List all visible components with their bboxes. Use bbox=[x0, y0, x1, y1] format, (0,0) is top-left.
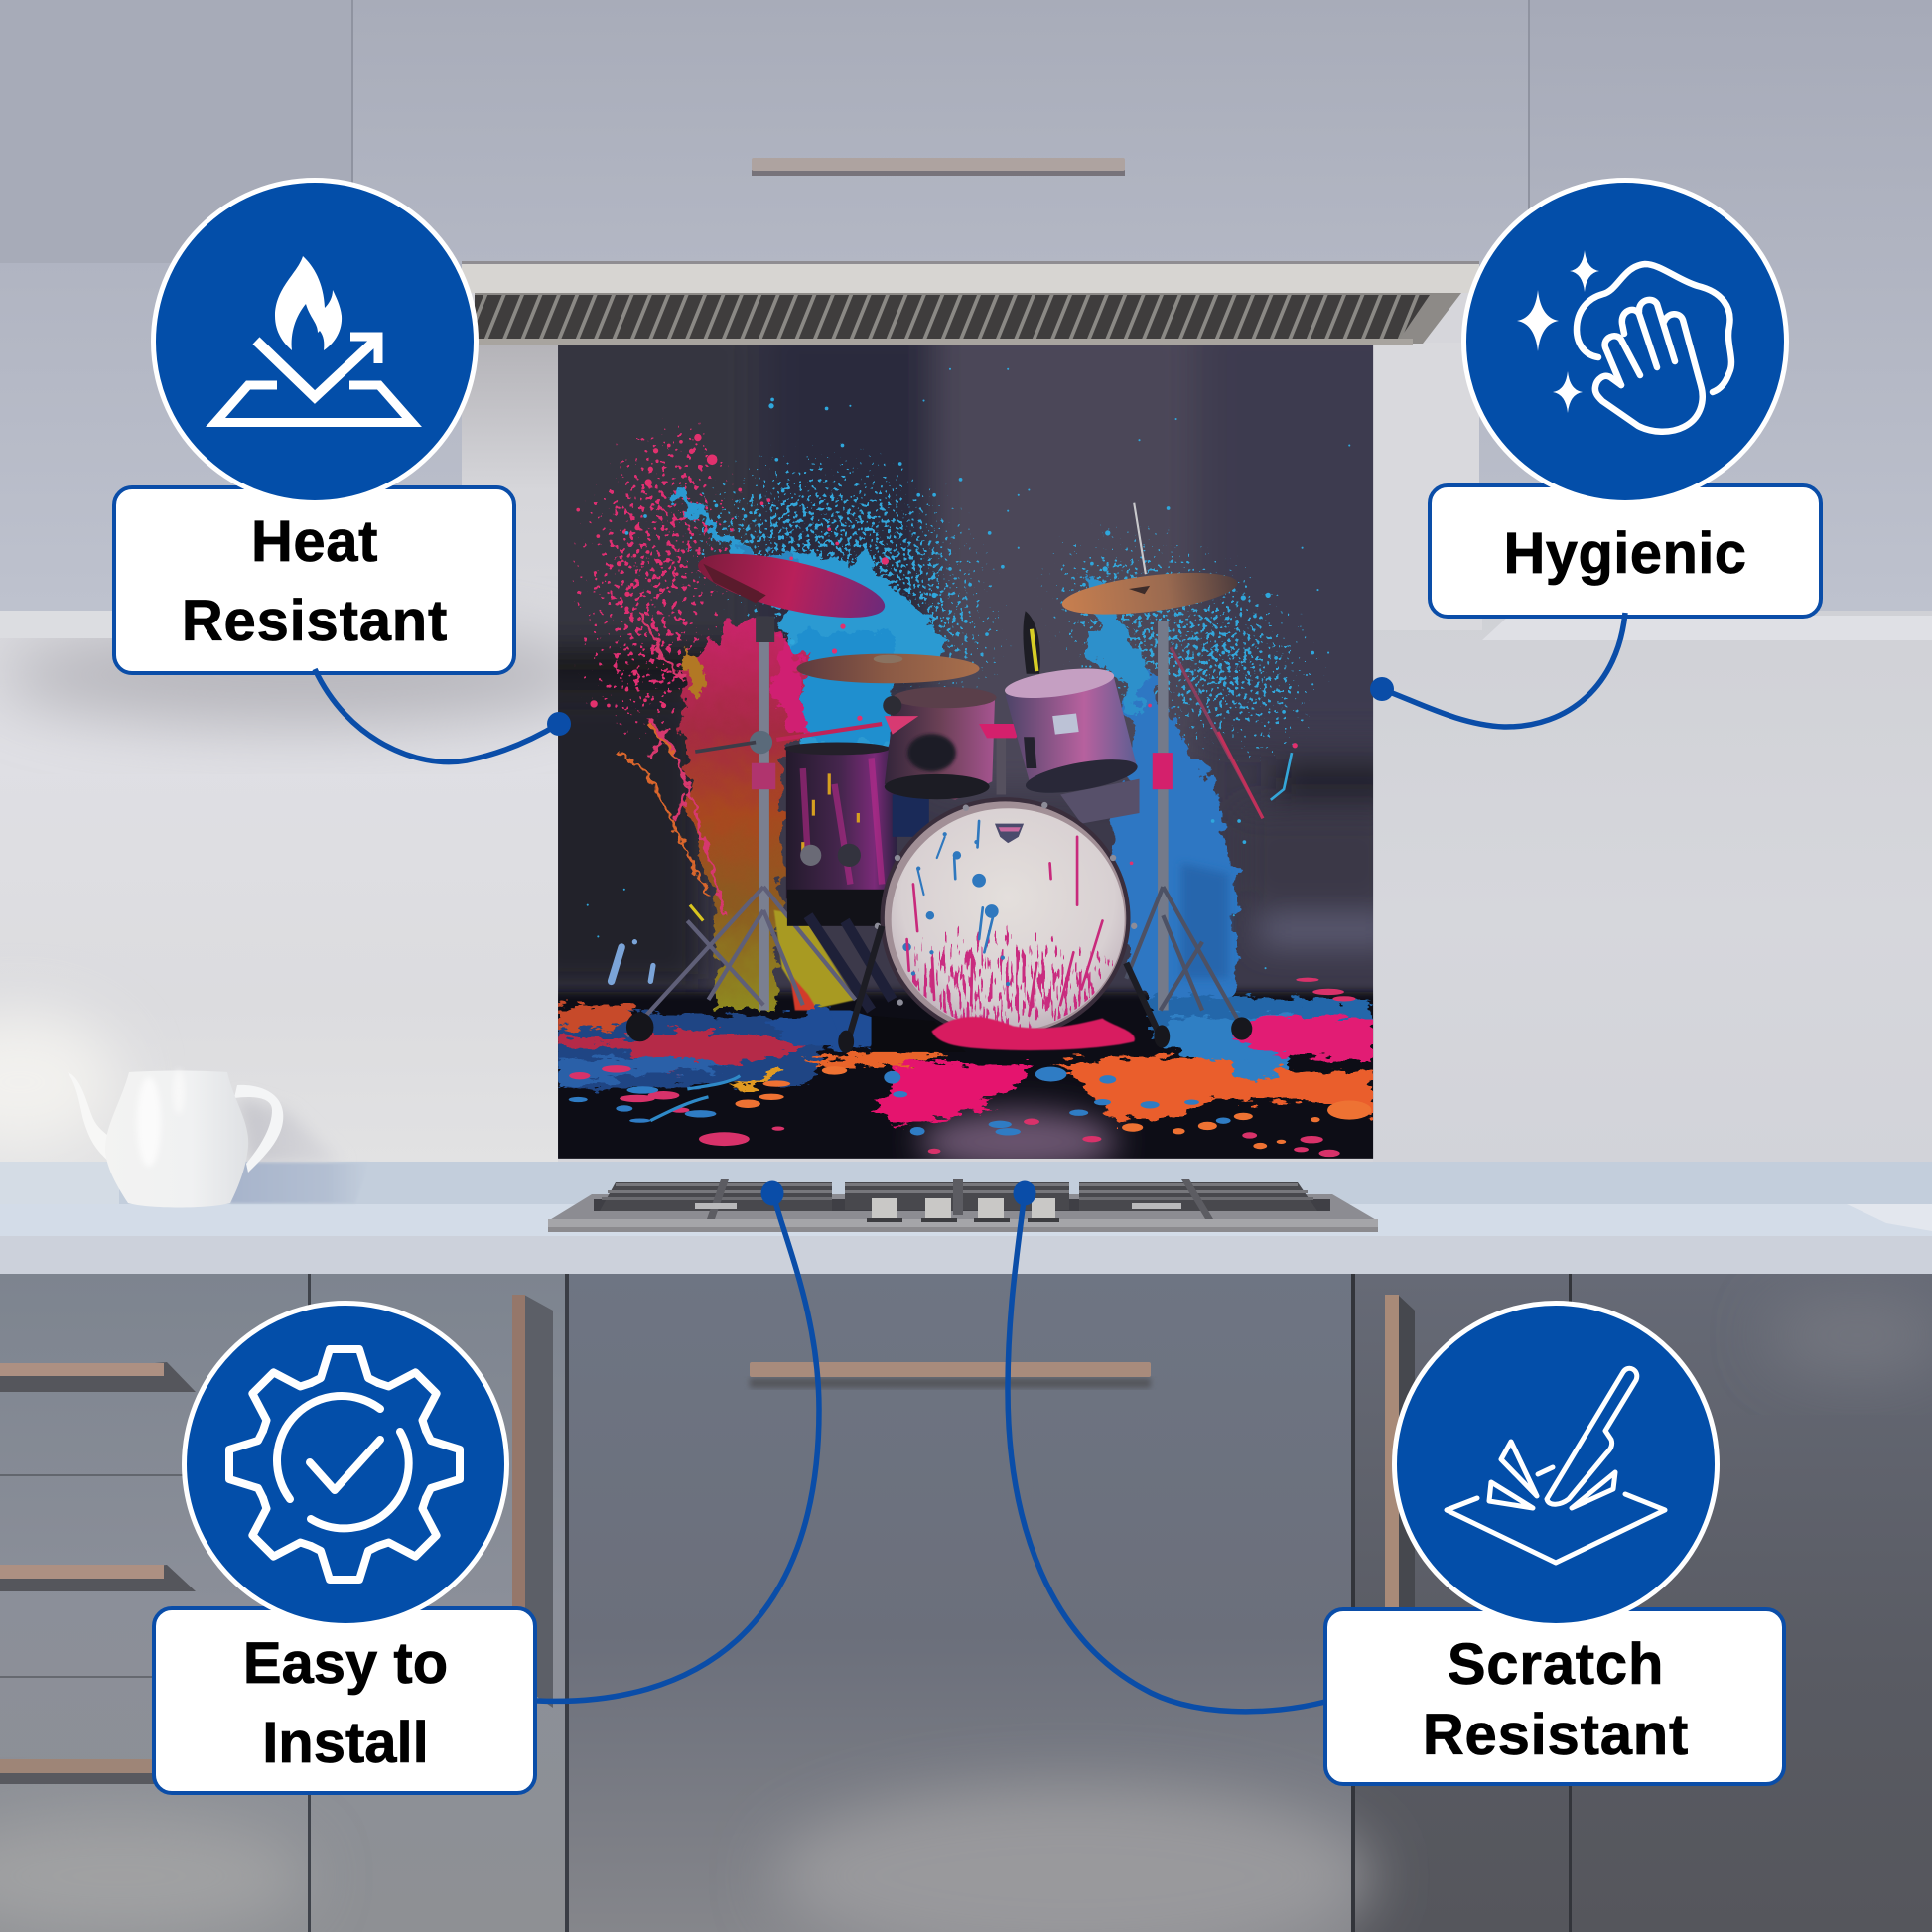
paint drips on the floor edge bbox=[612, 942, 653, 981]
badge: hygienic bbox=[1463, 181, 1787, 502]
countertop front edge bbox=[0, 1236, 1932, 1274]
upper right cabinet bbox=[1479, 0, 1932, 611]
right rack tom bbox=[1003, 663, 1140, 824]
label: hygienic: Hygienic bbox=[1504, 521, 1746, 586]
badge: easy to install bbox=[185, 1303, 506, 1626]
right blue drape paint bbox=[1087, 572, 1292, 1016]
callout: easy to install bbox=[154, 1181, 819, 1793]
left crash cymbal bbox=[698, 554, 886, 618]
anchor dot: scratch resistant bbox=[1013, 1181, 1036, 1205]
upper cabinet handle bbox=[752, 158, 1125, 176]
anchor dot: easy to install bbox=[760, 1181, 784, 1205]
lower cabinets bbox=[0, 1274, 567, 1932]
drawer handle three bbox=[0, 1759, 159, 1784]
blue paint splash bbox=[669, 487, 947, 753]
connector: easy to install bbox=[537, 1192, 819, 1701]
pink mist speckle bbox=[588, 438, 724, 737]
left rack tom bbox=[883, 687, 997, 800]
backsplash strip bbox=[0, 1162, 1932, 1204]
icon: gear with check bbox=[229, 1349, 460, 1580]
bass drum legs bbox=[838, 926, 1170, 1053]
pink spray on the drum head bbox=[887, 936, 1129, 1052]
tom mount bbox=[979, 611, 1040, 794]
callout: scratch resistant bbox=[1008, 1181, 1784, 1784]
label: scratch resistant: Resistant bbox=[1423, 1703, 1689, 1767]
label: heat resistant: Heat bbox=[251, 509, 378, 574]
cooktop hob bbox=[548, 1179, 1378, 1232]
extractor hood bbox=[462, 261, 1479, 345]
artwork backdrop bbox=[558, 345, 1374, 1159]
label: easy to install: Easy to bbox=[243, 1631, 448, 1696]
wall left of panel bbox=[0, 343, 558, 1167]
pink streaks on the drum head bbox=[907, 837, 1102, 1016]
floor paint pools bbox=[556, 978, 1373, 1157]
badge: heat resistant bbox=[153, 181, 477, 502]
label box: heat resistant bbox=[114, 487, 514, 673]
blue mist speckle bbox=[682, 464, 1312, 748]
floor paint droplets bbox=[569, 978, 1371, 1157]
upper right trim bbox=[1482, 616, 1932, 640]
callout: heat resistant bbox=[114, 181, 571, 762]
callout: hygienic bbox=[1370, 181, 1821, 727]
label: scratch resistant: Scratch bbox=[1448, 1632, 1664, 1697]
middle burner grate bbox=[845, 1179, 1069, 1215]
blue drips on the drum head bbox=[907, 821, 1008, 984]
label box: scratch resistant bbox=[1325, 1609, 1784, 1784]
pink paint puddle bbox=[931, 1017, 1135, 1050]
left burner grate bbox=[600, 1179, 832, 1219]
anchor dot: heat resistant bbox=[547, 712, 571, 736]
vertical handle left bbox=[512, 1295, 553, 1708]
wall right of panel bbox=[1373, 343, 1932, 1167]
floor bbox=[558, 987, 1374, 1159]
label box: easy to install bbox=[154, 1608, 535, 1793]
icon: flame over rebounding arrow bbox=[215, 256, 412, 423]
label: easy to install: Install bbox=[262, 1711, 429, 1775]
countertop bbox=[0, 1204, 1932, 1236]
control knobs bbox=[867, 1198, 1059, 1222]
left cymbal stand bbox=[626, 617, 882, 1041]
connector: hygienic bbox=[1382, 613, 1625, 727]
drum rim lugs bbox=[878, 805, 1134, 1003]
bass drum bbox=[878, 797, 1134, 1052]
anchor dot: hygienic bbox=[1370, 677, 1394, 701]
label: heat resistant: Resistant bbox=[182, 589, 448, 653]
connector: heat resistant bbox=[315, 669, 559, 762]
badge: scratch resistant bbox=[1394, 1303, 1718, 1626]
panel: drum kit paint splash artwork bbox=[558, 345, 1374, 1159]
drawer handle one bbox=[0, 1362, 196, 1392]
icon: knife scratching surface bbox=[1447, 1368, 1665, 1563]
pink and orange paint column bbox=[620, 611, 856, 1011]
right cymbal stand bbox=[1126, 621, 1263, 1040]
right cymbal bbox=[1060, 503, 1240, 621]
teapot bbox=[68, 1070, 369, 1207]
floor tom drum bbox=[784, 743, 966, 1052]
paint splatter pink bbox=[578, 438, 1295, 863]
upper left trim bbox=[0, 611, 462, 638]
icon: hand wiping with sparkles bbox=[1517, 250, 1731, 432]
drawer handle two bbox=[0, 1565, 196, 1591]
upper left cabinet bbox=[0, 0, 462, 611]
label box: hygienic bbox=[1430, 485, 1821, 617]
middle ride cymbal bbox=[796, 654, 980, 683]
paint splatter blue bbox=[588, 369, 1349, 968]
vertical handle right bbox=[1385, 1295, 1415, 1612]
right burner grate bbox=[1079, 1179, 1317, 1219]
upper centre cabinet bbox=[353, 0, 1528, 263]
lower centre handle bbox=[750, 1362, 1151, 1388]
connector: scratch resistant bbox=[1008, 1192, 1325, 1712]
